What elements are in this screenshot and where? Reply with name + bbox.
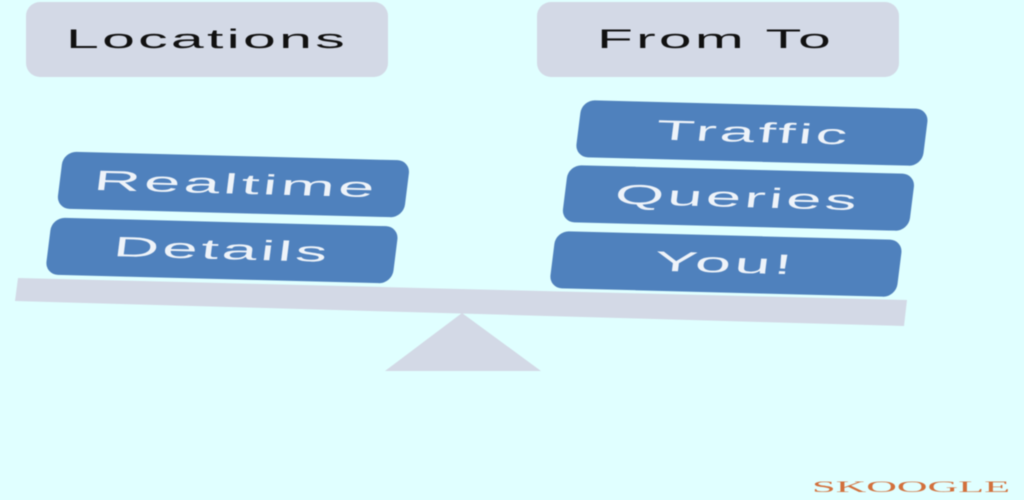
brand label: SKOOGLE: SKOOGLE <box>812 479 1010 496</box>
heading box: Locations <box>26 2 388 77</box>
block: Realtime: Realtime <box>92 165 380 203</box>
scale beam <box>15 278 907 326</box>
block: Traffic: Traffic <box>655 115 852 151</box>
heading box: From To <box>537 2 899 77</box>
block: Details: Details <box>112 231 332 268</box>
heading box: From To: From To <box>597 24 834 54</box>
block: You! <box>549 231 903 297</box>
block: You!: You! <box>653 246 797 280</box>
block: Queries <box>561 165 916 231</box>
scale fulcrum <box>385 313 541 371</box>
block: Realtime <box>56 152 410 218</box>
block: Queries: Queries <box>613 179 862 216</box>
heading box: Locations: Locations <box>66 24 348 54</box>
block: Details <box>45 218 399 284</box>
block: Traffic <box>575 100 929 166</box>
